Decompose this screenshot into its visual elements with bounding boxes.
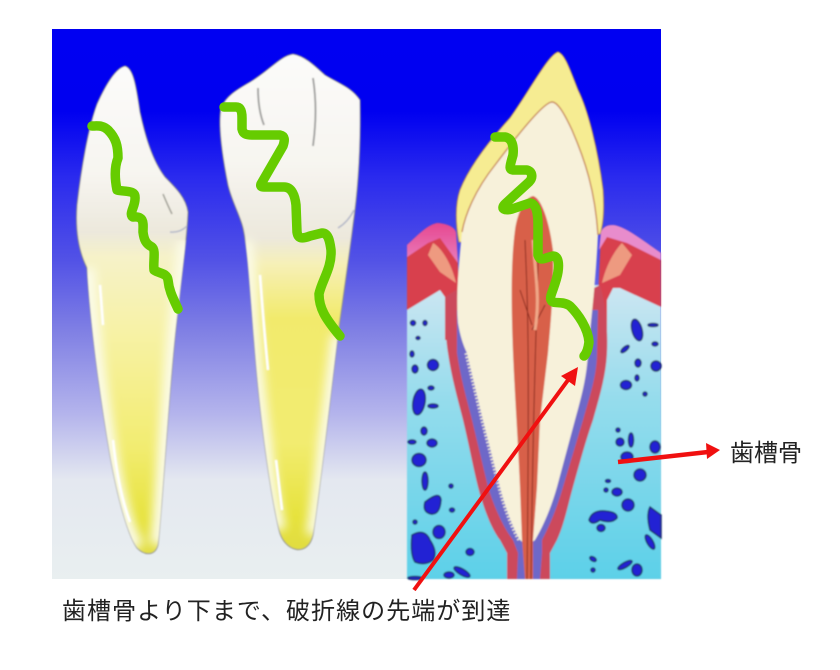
- right gum: [598, 225, 661, 340]
- ligament fibre streaks: [467, 353, 520, 540]
- dentin-enamel junction: [462, 102, 598, 235]
- fracture line: cross-section tooth: [495, 137, 589, 356]
- illustration: tooth cross-section in alveolar bone: [407, 52, 661, 580]
- pulp: [512, 196, 553, 579]
- tooth: left extracted tooth: [76, 66, 188, 554]
- bone pores: [408, 318, 661, 580]
- dentin: [457, 102, 598, 546]
- left gum: [407, 223, 460, 340]
- arrow: to alveolar bone label: [618, 443, 720, 462]
- tooth: center extracted tooth: [220, 54, 360, 550]
- label: alveolar bone: 歯槽骨: [730, 440, 802, 467]
- background panel: [52, 29, 661, 579]
- fracture line: center tooth: [224, 107, 340, 336]
- periodontal outline and bone wall: [445, 285, 607, 579]
- arrow: to fracture tip: [414, 367, 578, 590]
- fracture line: left tooth: [92, 126, 178, 309]
- infographic: root fractures: [52, 29, 800, 622]
- enamel: [456, 52, 604, 242]
- caption: 歯槽骨より下まで、破折線の先端が到達: [62, 598, 511, 625]
- alveolar bone: [407, 285, 661, 579]
- periodontal ligament: [457, 310, 598, 579]
